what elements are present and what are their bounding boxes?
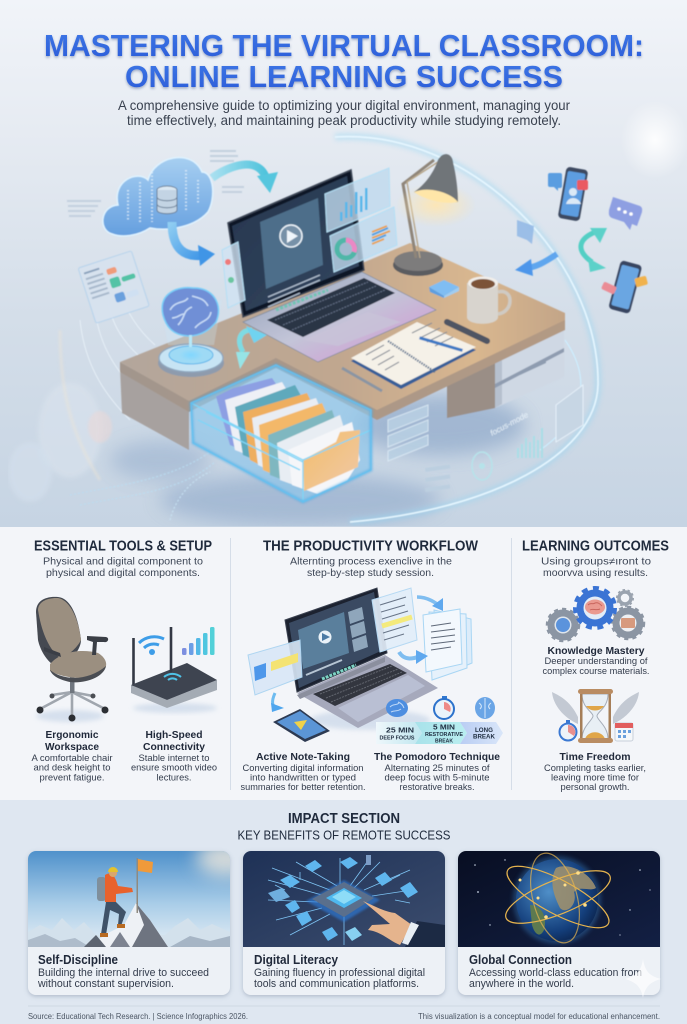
item: pomodoro technique: Alternating 25 minutes of: [384, 763, 490, 773]
focus mode dashboard: focus-mode: [489, 410, 530, 438]
item: active note-taking: [240, 751, 366, 792]
intro text: physical and digital components.: [46, 568, 200, 579]
step: long break: BREAK: [473, 734, 496, 740]
middle section background: [0, 527, 687, 800]
arrow: cloud to laptop: [212, 165, 278, 193]
teal circular arrows: [581, 228, 607, 272]
icon: ergonomic chair: [36, 597, 108, 722]
title: Digital Literacy: [254, 952, 339, 967]
description: Building the internal drive to succeed: [38, 967, 209, 979]
file box with folders: [191, 365, 371, 502]
floating note card: [248, 640, 302, 695]
impact section heading: [238, 811, 451, 842]
item: knowledge mastery: [542, 645, 650, 676]
image: circuit chip and hand: [243, 851, 445, 947]
arrow to phone: [271, 693, 284, 712]
desk side left: [120, 368, 189, 450]
hologram brain on base: [158, 288, 224, 377]
focus mode dashboard: [425, 385, 583, 492]
item: pomodoro technique: [374, 751, 500, 792]
item: active note-taking: into handwritten or typed: [250, 772, 356, 782]
subtitle: A comprehensive guide to optimizing your digital environment, managing your: [118, 97, 570, 113]
laptop: [228, 170, 436, 362]
step: restorative break: RESTORATIVE: [425, 732, 464, 738]
item: pomodoro technique: restorative breaks.: [400, 782, 474, 792]
phone: [273, 709, 330, 742]
title: [44, 28, 644, 94]
card: digital literacy: [243, 851, 445, 995]
icon: sparkle: [625, 959, 661, 998]
item: ergonomic workspace: Ergonomic: [46, 729, 99, 741]
title: ONLINE LEARNING SUCCESS: [125, 59, 563, 94]
video player: [260, 198, 323, 289]
heading: THE PRODUCTIVITY WORKFLOW: [263, 538, 478, 554]
blue sticky cube: [429, 280, 459, 298]
description: anywhere in the world.: [469, 978, 574, 990]
swap arrow: [236, 326, 267, 369]
icon: brain 2: [475, 697, 495, 719]
item: high-speed connectivity: ensure smooth video: [131, 762, 217, 772]
heading: ESSENTIAL TOOLS & SETUP: [34, 538, 212, 554]
image: climber on peak: [28, 851, 230, 947]
icon: wifi router: [131, 627, 217, 713]
app dock: [276, 290, 328, 310]
chat bubbles: [517, 173, 642, 244]
subtitle: [118, 97, 570, 128]
pen on desk: [342, 368, 382, 391]
trackpad: [303, 312, 401, 346]
card: self-discipline: [26, 850, 232, 998]
cloud with database: [103, 158, 213, 236]
panel: learning outcomes: [522, 538, 669, 792]
floating chart panels: [222, 168, 397, 308]
desk: [120, 243, 565, 450]
item: knowledge mastery: complex course materials.: [542, 666, 650, 676]
description: [254, 967, 425, 990]
title: Global Connection: [469, 952, 572, 967]
intro text: step-by-step study session.: [307, 568, 434, 579]
front folder: [303, 430, 360, 491]
footer rule: [28, 1005, 660, 1007]
item: pomodoro technique: deep focus with 5-minute: [384, 772, 490, 782]
heading: LEARNING OUTCOMES: [522, 538, 669, 554]
hero illustration: isometric study desk: [8, 100, 687, 526]
item: ergonomic workspace: Workspace: [45, 741, 99, 753]
description: tools and communication platforms.: [254, 978, 419, 990]
intro text: moorvva using results.: [543, 568, 648, 579]
item: high-speed connectivity: [131, 729, 217, 782]
intro text: Alternting process exenclive in the: [290, 556, 453, 568]
description: Accessing world-class education from: [469, 967, 642, 979]
data swirl lines: [70, 290, 215, 520]
item: high-speed connectivity: Stable internet to: [138, 753, 210, 763]
footer source: Source: Educational Tech Research. | Science Infographics 2026.: [28, 1012, 248, 1021]
item: time freedom: Time Freedom: [560, 751, 630, 763]
flow arrows: [399, 597, 443, 664]
step: restorative break: [425, 722, 464, 744]
glass box outline: [191, 365, 371, 502]
description: Gaining fluency in professional digital: [254, 967, 425, 979]
folder stack: [215, 378, 360, 500]
keyboard: [267, 278, 395, 337]
item: ergonomic workspace: A comfortable chair: [32, 753, 112, 763]
item: ergonomic workspace: [32, 729, 112, 782]
item: active note-taking: Converting digital information: [242, 763, 364, 773]
description: [37, 967, 209, 990]
item: active note-taking: Active Note-Taking: [256, 751, 350, 763]
laptop with video lecture: [285, 588, 438, 730]
item: high-speed connectivity: lectures.: [156, 772, 192, 782]
item: ergonomic workspace: prevent fatigue.: [40, 772, 104, 782]
dark ruler: [447, 322, 487, 341]
item: time freedom: Completing tasks earlier,: [544, 763, 646, 773]
step: deep focus: DEEP FOCUS: [380, 736, 415, 742]
icon: brain: [386, 699, 408, 717]
card: global connection: [458, 848, 661, 998]
stacked pages: [423, 609, 472, 680]
floating schedule card: [78, 251, 149, 323]
step: restorative break: BREAK: [435, 738, 453, 744]
footer disclaimer: This visualization is a conceptual model for educational enhancement.: [418, 1012, 660, 1021]
note lines under video: [268, 275, 320, 307]
icon: gears: [548, 588, 644, 640]
spiral notebook: [351, 322, 476, 389]
step: deep focus: 25 MIN: [386, 726, 414, 734]
small phone: [601, 260, 648, 314]
desk front edge: [120, 318, 565, 420]
impact section background: [0, 800, 687, 1024]
impact section heading: KEY BENEFITS OF REMOTE SUCCESS: [238, 828, 451, 842]
intro text: [541, 556, 652, 579]
desk top: [120, 243, 565, 410]
cabinet: [495, 325, 564, 408]
intro text: [290, 556, 453, 579]
coffee mug: [467, 276, 510, 324]
floating notes panel: [372, 588, 417, 652]
item: time freedom: personal growth.: [560, 782, 630, 792]
blue incoming arrow: [515, 254, 557, 276]
light flares: [8, 100, 687, 526]
step: deep focus: [380, 726, 415, 742]
faint data text blocks: [67, 150, 244, 217]
item: active note-taking: summaries for better retention.: [240, 782, 366, 792]
step: long break: [473, 728, 496, 740]
laptop base: [243, 272, 436, 362]
hero background: [0, 0, 687, 527]
pomodoro timeline: [376, 696, 503, 744]
item: knowledge mastery: Deeper understanding of: [544, 656, 648, 666]
description: [469, 967, 642, 990]
dome arc: [335, 137, 598, 522]
panel dividers: [230, 538, 512, 790]
image: glowing globe: [458, 848, 660, 948]
step: restorative break: 5 MIN: [433, 722, 455, 732]
intro text: [43, 556, 204, 579]
impact section heading: IMPACT SECTION: [288, 811, 400, 827]
screen: [228, 170, 364, 317]
desk leg dark: [447, 358, 495, 418]
item: high-speed connectivity: High-Speed: [146, 729, 202, 741]
drawer tags: [388, 405, 428, 461]
item: time freedom: [544, 751, 646, 792]
panel: productivity workflow: [240, 538, 503, 792]
item: knowledge mastery: Knowledge Mastery: [548, 645, 645, 657]
desk lamp: [393, 154, 476, 276]
item: pomodoro technique: The Pomodoro Technique: [374, 751, 500, 763]
item: ergonomic workspace: and desk height to: [34, 762, 110, 772]
intro text: Physical and digital component to: [43, 556, 204, 568]
title: MASTERING THE VIRTUAL CLASSROOM:: [44, 28, 644, 63]
item: high-speed connectivity: Connectivity: [143, 741, 205, 753]
icon: winged hourglass: [552, 689, 639, 743]
description: without constant supervision.: [37, 978, 174, 990]
title: Self-Discipline: [38, 952, 118, 967]
panel: essential tools and setup: [32, 538, 217, 782]
subtitle: time effectively, and maintaining peak productivity while studying remotely.: [127, 112, 561, 128]
item: time freedom: leaving more time for: [551, 772, 639, 782]
icon: stopwatch: [434, 696, 454, 719]
phone with social icons: [558, 166, 588, 222]
step: long break: LONG: [475, 728, 493, 734]
arrow: cloud to desk: [172, 222, 215, 266]
intro text: Using groups≠ıront to: [541, 556, 652, 568]
